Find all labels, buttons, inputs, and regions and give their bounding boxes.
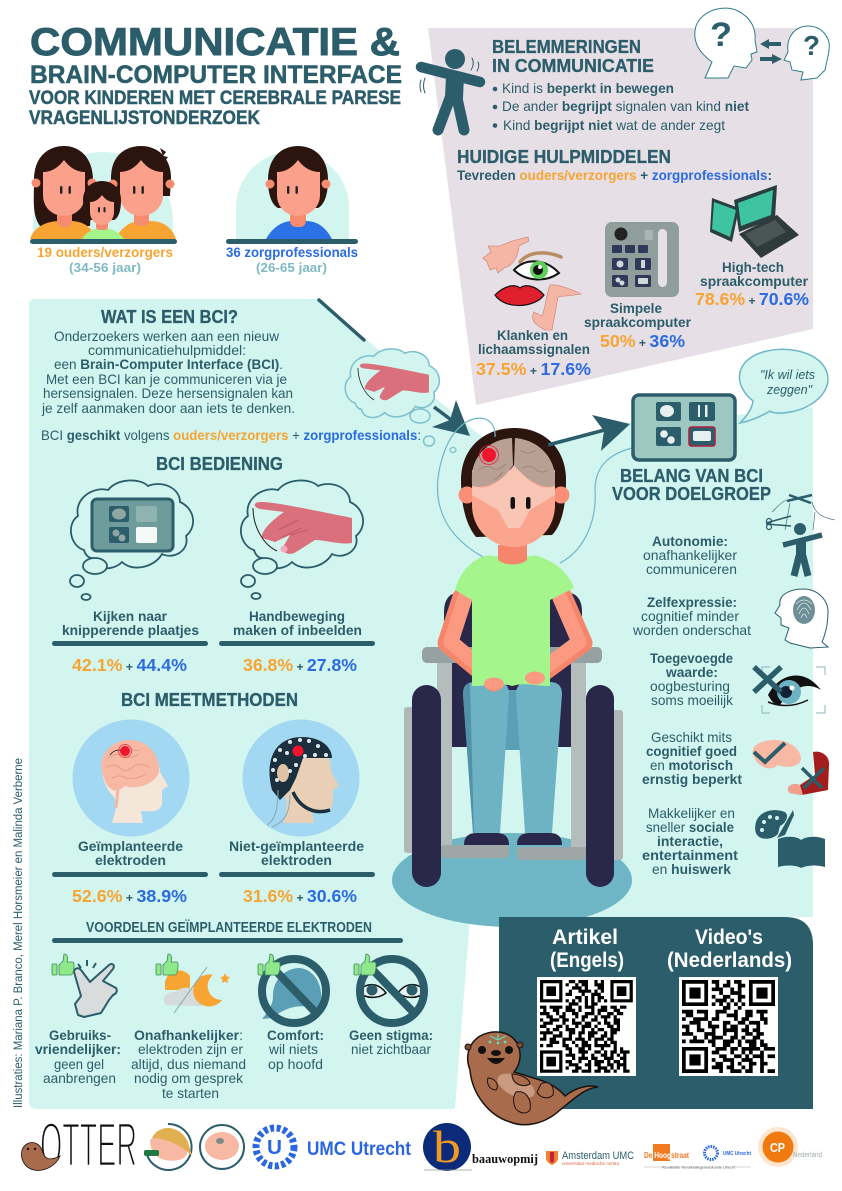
text: self expression: [632, 595, 751, 638]
icon: hand thought bubble: [345, 349, 456, 452]
label: hand movement: [219, 609, 375, 675]
brain upper lobes: [472, 438, 555, 487]
icon: simple speech device: [605, 222, 679, 297]
brain lower: [472, 465, 555, 528]
label: professionals: 36 zorgprofessionals: [226, 244, 358, 260]
electrode: [480, 446, 498, 464]
text: comfort: op hoofd: [268, 1057, 323, 1072]
text: more independent: elektroden zijn er: [138, 1042, 243, 1057]
label: simple device: [584, 301, 692, 351]
logo: NeuroSAFARI: [144, 1124, 192, 1170]
logo: De Hoogstraat: Revalidatie Revalidatiegeneeskunde Utrecht: [662, 1166, 735, 1170]
list: barriers: Kind begrijpt niet wat de ander zegt: [503, 118, 725, 133]
logo: UMC Utrecht: [256, 1128, 412, 1166]
heading: current aids: HUIDIGE HULPMIDDELEN: [457, 147, 671, 167]
text: BCI explanation: je zelf aanmaken door aan iets te denken.: [41, 401, 295, 416]
label: simple device: Simpele: [610, 301, 662, 316]
logo: CP Nederland: [758, 1127, 822, 1167]
text: suitable if: [642, 730, 743, 787]
heading: barriers: BELEMMERINGEN: [492, 37, 641, 57]
icon: thought cloud with hand: [241, 480, 363, 599]
text: comfort: Comfort:: [267, 1028, 324, 1043]
logo: CP Nederland: CP: [770, 1140, 785, 1155]
illustration: care professional: [226, 146, 358, 244]
arrow: into thought bubble: [319, 300, 364, 340]
legs: [463, 682, 562, 845]
wheelchair: [404, 592, 623, 887]
icon: palette and book: [755, 810, 825, 868]
arrow: to head: [432, 400, 470, 436]
icon: tablet and laptop: [710, 185, 799, 258]
label: parents: (34-56 jaar): [69, 260, 141, 275]
neck: [498, 545, 527, 564]
heading: article: Artikel: [552, 926, 618, 949]
panel: communication barriers background: [428, 28, 813, 405]
text: BCI explanation: Met een BCI kan je communiceren via je: [46, 372, 287, 387]
label: sounds and body signals: Klanken en: [497, 328, 568, 343]
logo: Amsterdam UMC: [546, 1150, 634, 1166]
text: autonomy: communiceren: [646, 562, 737, 577]
text: BCI explanation: Onderzoekers werken aan een nieuw: [54, 329, 279, 344]
heading: videos: [667, 926, 792, 972]
icon: crossed out cap: [258, 954, 326, 1023]
label: non-implanted electrodes: elektroden: [261, 853, 332, 868]
text: user friendly: vriendelijker:: [35, 1042, 121, 1057]
QR code: videos: [679, 977, 778, 1076]
speech bubble: zeggen": [766, 382, 813, 397]
text: BCI explanation: hersensignalen. Deze hersensignalen kan: [43, 386, 293, 401]
text: added value: Toegevoegde: [650, 651, 733, 666]
panel: links: [499, 917, 813, 1109]
label: parents: [37, 244, 173, 275]
text: more independent: Onafhankelijker :: [134, 1028, 243, 1043]
text: user friendly: Gebruiks-: [49, 1028, 111, 1043]
label: high-tech device: 78.6% + 70.6%: [695, 289, 809, 309]
eyes: [510, 497, 530, 509]
ears: [458, 486, 570, 504]
text: easier and faster: sneller sociale: [646, 820, 734, 835]
QR code: article: [537, 977, 636, 1076]
heading: barriers: [492, 37, 654, 76]
label: look at flashing pictures: [52, 609, 208, 675]
list: barriers: Kind is beperkt in bewegen: [502, 81, 674, 96]
speech bubble: "Ik wil iets: [760, 367, 815, 382]
icon: brain with check and arm with cross: [753, 740, 829, 795]
icon: thought cloud with tablet: [70, 480, 193, 600]
icon: non-implanted electrodes cap: [242, 720, 360, 836]
icon: crossed out eye tracking: [754, 667, 825, 713]
label: non-implanted electrodes: Niet-geïmplanteerde: [229, 839, 365, 854]
heading: what is a BCI: WAT IS EEN BCI?: [101, 307, 238, 327]
list: barriers: [493, 81, 749, 133]
logo: baauwopmij: b: [433, 1121, 461, 1172]
hands: [484, 672, 545, 690]
logo: UMC Utrecht: U: [267, 1137, 282, 1159]
text: easier and faster: en huiswerk: [652, 862, 731, 877]
label: sounds and body signals: [476, 328, 591, 379]
label: simple device: 50% + 36%: [600, 331, 685, 351]
logo: UTRECHT-BCI: [200, 1125, 244, 1169]
illustration: child in wheelchair with BCI: [392, 418, 632, 927]
title: VRAGENLIJSTONDERZOEK: [29, 107, 260, 129]
text: more independent: nodig om gesprek: [134, 1071, 243, 1086]
arrow: head to tablet: [548, 415, 630, 451]
label: professionals: (26-65 jaar): [256, 260, 327, 275]
logo: baauwopmij: [423, 1121, 538, 1172]
heading: videos: Video's: [695, 926, 763, 949]
label: non-implanted electrodes: 31.6% + 30.6%: [243, 886, 357, 906]
torso: [455, 556, 574, 686]
face: [472, 470, 555, 547]
icon: two heads with question marks: [695, 8, 829, 80]
label: sounds and body signals: 37.5% + 17.6%: [476, 359, 591, 379]
text: suitable if: en motorisch: [650, 758, 733, 773]
text: no stigma: niet zichtbaar: [351, 1042, 431, 1057]
text: suitability legend: BCI geschikt volgens ouders/verzorgers + zorgprofessionals:: [41, 428, 421, 443]
heading: importance of BCI: [612, 466, 771, 504]
hair: [461, 428, 566, 537]
text: easier and faster: interactie,: [657, 834, 723, 849]
label: high-tech device: [695, 260, 809, 309]
text: added value: soms moeilijk: [651, 693, 733, 708]
list: barriers: De ander begrijpt signalen van kind niet: [502, 99, 749, 114]
text: self expression: cognitief minder: [641, 609, 739, 624]
panel: mint background: [29, 299, 813, 1109]
label: high-tech device: spraakcomputer: [700, 274, 809, 289]
text: BCI explanation: [41, 329, 295, 416]
icon: hand, eye, lips and arm: [483, 237, 581, 330]
label: implanted electrodes: Geïmplanteerde: [78, 839, 183, 854]
label: hand movement: Handbeweging: [249, 609, 345, 624]
label: implanted electrodes: elektroden: [95, 853, 166, 868]
label: high-tech device: High-tech: [722, 260, 784, 275]
text: comfort: wil niets: [268, 1042, 318, 1057]
text: added value: oogbesturing: [650, 679, 730, 694]
heading: barriers: IN COMMUNICATIE: [492, 56, 654, 76]
logo: CP Nederland: Nederland: [793, 1152, 822, 1159]
text: easier and faster: entertainment: [642, 848, 739, 863]
heading: article: [550, 926, 624, 972]
text: autonomy: [643, 534, 737, 577]
text: no stigma: [349, 1028, 433, 1057]
text: illustration credits: Illustraties: Mariana P. Branco, Merel Horsmeier en Malinda Verberne: [13, 758, 25, 1108]
text: added value: waarde:: [665, 665, 718, 680]
icon: crossed out eyes: [354, 954, 426, 1023]
text: autonomy: onafhankelijker: [643, 548, 737, 563]
thought line to tablet: [560, 448, 632, 563]
text: autonomy: Autonomie:: [652, 534, 728, 549]
icon: communication tablet: [633, 395, 735, 460]
label: implanted electrodes: [52, 839, 208, 906]
text: self expression: Zelfexpressie:: [647, 595, 737, 610]
label: implanted electrodes: 52.6% + 38.9%: [72, 886, 187, 906]
heading: article: (Engels): [550, 949, 624, 972]
label: non-implanted electrodes: [219, 839, 375, 906]
title: BRAIN-COMPUTER INTERFACE: [30, 61, 402, 89]
heading: current aids: Tevreden ouders/verzorgers + zorgprofessionals:: [457, 168, 772, 183]
label: look at flashing pictures: Kijken naar: [93, 609, 168, 624]
heading: BCI control: BCI BEDIENING: [156, 454, 283, 474]
text: easier and faster: [642, 806, 739, 877]
text: suitable if: ernstig beperkt: [642, 772, 743, 787]
heading: benefits of implanted electrodes: [52, 919, 403, 943]
speech bubble: [739, 349, 828, 423]
text: more independent: [131, 1028, 246, 1101]
icon: day and night with thumb up: [156, 954, 230, 1013]
text: no stigma: Geen stigma:: [349, 1028, 433, 1043]
heading: BCI measurement methods: BCI MEETMETHODEN: [121, 690, 298, 710]
logo: De Hoogstraat: De Hoogstraat: [644, 1151, 689, 1160]
text: suitable if: Geschikt mits: [651, 730, 732, 745]
icon: person with stiff arm: [420, 49, 480, 130]
title: [29, 21, 402, 129]
title: COMMUNICATIE &: [30, 21, 400, 64]
text: OTTER: [40, 1111, 137, 1180]
heading: importance of BCI: BELANG VAN BCI: [620, 466, 763, 486]
floor shadow: [392, 833, 632, 927]
logo: baauwopmij: baauwopmij: [472, 1151, 538, 1166]
text: easier and faster: Makkelijker en: [648, 806, 735, 821]
text: BCI explanation: een Brain-Computer Interface (BCI).: [54, 357, 283, 372]
logo: UMC Utrecht: UMC Utrecht: [307, 1139, 412, 1160]
text: user friendly: geen gel: [54, 1057, 104, 1072]
label: parents: 19 ouders/verzorgers: [37, 244, 173, 260]
logo: UMC Utrecht small: [704, 1146, 751, 1160]
text: more independent: altijd, dus niemand: [131, 1057, 246, 1072]
icon: two heads with question marks: ?: [803, 30, 820, 61]
label: sounds and body signals: lichaamssignalen: [478, 342, 590, 357]
text: more independent: te starten: [162, 1086, 219, 1101]
icon: two heads with question marks: ?: [710, 16, 732, 54]
text: BCI explanation: communicatiehulpmiddel:: [88, 343, 246, 358]
text: suitable if: cognitief goed: [646, 744, 737, 759]
text: user friendly: aanbrengen: [43, 1071, 116, 1086]
icon: otter mascot: [465, 1032, 598, 1125]
arms: [447, 597, 583, 682]
heading: current aids: [457, 147, 772, 183]
heading: videos: (Nederlands): [667, 949, 792, 972]
text: user friendly: [35, 1028, 121, 1086]
logo: Amsterdam UMC: Amsterdam UMC: [562, 1150, 634, 1162]
logo: UMC Utrecht small: UMC Utrecht: [723, 1151, 751, 1157]
heading: benefits of implanted electrodes: VOORDELEN GEÏMPLANTEERDE ELEKTRODEN: [86, 919, 372, 936]
label: hand movement: maken of inbeelden: [233, 623, 362, 638]
illustration: parents and child: [30, 146, 177, 244]
logo: OTTER: [22, 1111, 137, 1180]
label: simple device: spraakcomputer: [584, 315, 692, 330]
text: added value: [650, 651, 733, 708]
label: look at flashing pictures: knipperende plaatjes: [62, 623, 199, 638]
text: comfort: [267, 1028, 324, 1072]
icon: puppet with cut strings: [766, 495, 835, 576]
icon: snapping hand with thumb up: [52, 954, 117, 1017]
label: hand movement: 36.8% + 27.8%: [243, 655, 357, 675]
logo: De Hoogstraat: [644, 1144, 751, 1170]
label: professionals: [226, 244, 358, 275]
icon: head with fingerprint: [775, 589, 828, 648]
heading: importance of BCI: VOOR DOELGROEP: [612, 484, 771, 504]
text: self expression: worden onderschat: [632, 623, 751, 638]
logo: Amsterdam UMC: universitair medische centra: [562, 1161, 619, 1166]
thought line to left: [437, 418, 495, 557]
icon: implanted electrodes head: [72, 720, 190, 836]
title: VOOR KINDEREN MET CEREBRALE PARESE: [29, 87, 401, 109]
label: look at flashing pictures: 42.1% + 44.4%: [72, 655, 187, 675]
